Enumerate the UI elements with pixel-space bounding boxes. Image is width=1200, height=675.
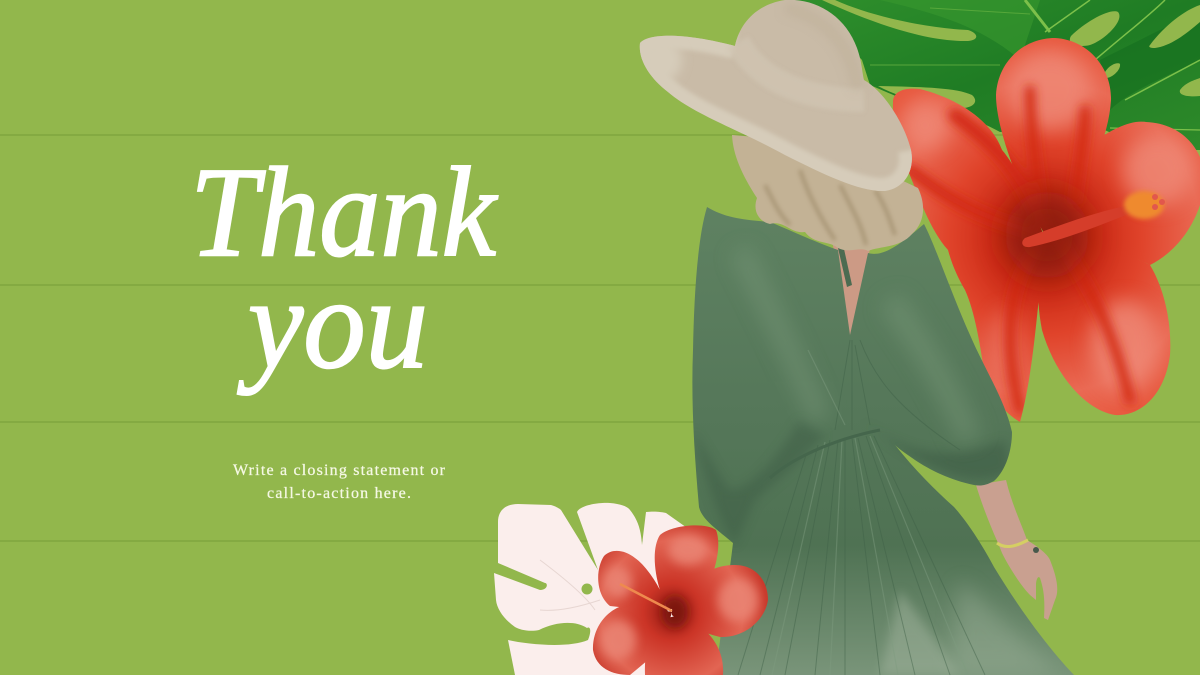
dark throat [1005,191,1089,279]
light petal washes [901,50,1194,390]
flower pistil [1022,191,1165,247]
arm and hand [976,480,1057,620]
red streaks [910,90,1130,410]
closing statement text [233,462,446,502]
pleats [738,340,985,675]
leaf veins [870,0,1200,130]
straw hat [635,0,920,195]
bare back [832,240,872,340]
small red hibiscus flower [592,525,768,675]
large red hibiscus flower [885,30,1200,425]
title [190,141,498,396]
leaf slots showing background [822,0,1200,108]
small flower stamen [620,584,672,611]
title: Thank [190,141,498,283]
closing statement text: call-to-action here. [267,485,411,502]
green monstera leaf [795,0,1200,150]
woman in green dress and hat [635,0,1080,675]
white leaf hole and veins [540,560,600,610]
dress [685,200,1080,675]
brim edge band [640,36,912,191]
title: you [237,252,428,396]
halter strap [838,240,852,287]
crown ribbon [738,42,864,100]
closing statement text: Write a closing statement or [233,462,446,479]
white monstera leaf [494,503,700,675]
hair [732,135,923,251]
sleeve shading [704,425,818,535]
